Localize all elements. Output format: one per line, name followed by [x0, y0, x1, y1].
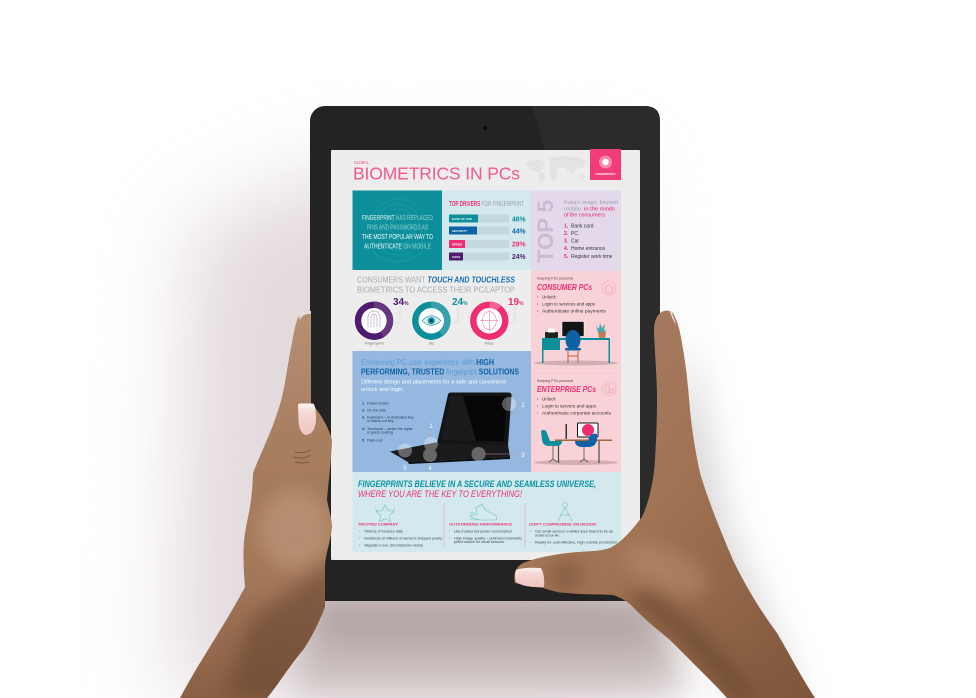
- column: don't compromise on design: Ready for cost-effective, high volume production: [535, 540, 617, 544]
- column: trusted company: Trillions of touches daily: [364, 530, 403, 534]
- camera: [483, 126, 487, 130]
- placement list: [362, 402, 414, 442]
- bar: speed: 28%: [512, 242, 526, 248]
- consumer text: Keeping PCs personal: [537, 276, 573, 280]
- column: trusted company: ›: [359, 530, 360, 534]
- panel: top drivers: [442, 190, 531, 270]
- knuckle creases: [294, 450, 311, 463]
- panel: PC user experience: unlock and login.: [361, 387, 404, 393]
- panel: PC user experience: [352, 351, 531, 472]
- bar: security: 44%: [512, 228, 526, 236]
- enterprise text: Unlock: [542, 396, 557, 402]
- left hand: [180, 310, 332, 698]
- placement list: 3.: [362, 416, 365, 420]
- column: outstanding performance: OUTSTANDING PERFORMANCE: [449, 522, 512, 526]
- tablet body: [310, 106, 660, 601]
- title: BIOMETRICS IN PCs: [353, 164, 520, 184]
- heading: CONSUMERS WANT TOUCH AND TOUCHLESS: [357, 274, 515, 284]
- kicker: GLOBAL: [354, 160, 370, 165]
- panel: consumer and enterprise PCs: [531, 271, 621, 472]
- column: trusted company: Integrated in over 100 smartphone models: [364, 544, 423, 548]
- intro: Future usage, beyond: [564, 200, 618, 206]
- wrist shadow: [226, 561, 325, 698]
- right hand: [510, 300, 820, 698]
- panel: fingerprint replaced pins: AUTHENTICATE ON MOBILE: [364, 242, 431, 250]
- back of hand highlight: [628, 544, 706, 598]
- donut: fingerprint: Fingerprint: [364, 340, 384, 346]
- placement list: or glass coating: [367, 430, 393, 434]
- donut: face: [470, 297, 524, 346]
- enterprise text: [537, 374, 616, 416]
- column: outstanding performance: performance for small sensors: [454, 540, 504, 544]
- description: Different design and placements for a safe and convenient: [361, 380, 506, 386]
- heading: Enhancing PC user experience with HIGH: [361, 358, 494, 367]
- consumer text: ›: [537, 308, 539, 314]
- bar: speed: SPEED: [452, 242, 463, 246]
- ranked list: Car: [571, 238, 579, 244]
- ranked list: 1.: [564, 224, 569, 230]
- logo: [590, 149, 621, 180]
- donut: iris: Iris: [429, 340, 434, 346]
- infographic: [352, 149, 621, 552]
- bar: ease of use: 46%: [512, 216, 526, 224]
- donut: face: Face: [485, 340, 495, 346]
- column: trusted company: TRUSTED COMPANY: [358, 522, 398, 526]
- column: don't compromise on design: ›: [530, 530, 531, 534]
- column: outstanding performance: [449, 504, 522, 544]
- panel: fingerprint replaced pins: PINS AND PASSWORDS AS: [367, 222, 428, 232]
- sensor markers: 5: [403, 466, 407, 472]
- donut: iris: 24%: [452, 297, 468, 308]
- placement list: or stand-out key: [367, 419, 394, 423]
- panel: top 5: mobile, in the minds: [564, 206, 616, 212]
- sensor markers: 1: [429, 424, 433, 430]
- bar: speed: [449, 240, 526, 248]
- donut: face: 19%: [508, 297, 524, 308]
- column: don't compromise on design: [529, 502, 617, 544]
- logo: FINGERPRINTS: [596, 172, 616, 176]
- column: don't compromise on design: Our small sensors enables your brand to be as: [535, 530, 613, 534]
- crease shadow: [625, 590, 760, 698]
- column: outstanding performance: ›: [449, 536, 450, 540]
- panel: fingerprint replaced pins: [352, 190, 442, 270]
- sensor markers: [398, 397, 525, 472]
- bar: cool: [449, 252, 526, 261]
- placement list: 2.: [362, 408, 365, 412]
- donut: fingerprint: [354, 297, 409, 346]
- column: don't compromise on design: DON'T COMPROMISE ON DESIGN: [529, 522, 596, 526]
- panel: touch and touchless: [354, 274, 524, 346]
- placement list: On the side: [367, 408, 386, 412]
- ranked list: Register work time: [571, 254, 613, 260]
- panel: touch and touchless: BIOMETRICS TO ACCESS THEIR PC/LAPTOP: [357, 284, 515, 294]
- sensor markers: 4: [428, 466, 432, 472]
- panel: top 5: [531, 190, 621, 271]
- bar: ease of use: EASE OF USE: [452, 217, 472, 221]
- enterprise text: Authenticate corporate accounts: [542, 410, 612, 416]
- heading: FINGERPRINTS BELIEVE IN A SECURE AND SEAMLESS UNIVERSE,: [358, 479, 596, 489]
- placement list: Keyboard – in dedicated key: [367, 416, 414, 420]
- laptop: [390, 392, 512, 464]
- enterprise text: ›: [537, 410, 539, 416]
- enterprise text: Keeping PCs personal: [537, 379, 573, 383]
- consumer text: [537, 276, 616, 314]
- panel: fingerprint replaced pins: THE MOST POPULAR WAY TO: [362, 232, 433, 241]
- panel: fingerprints believe: [352, 472, 621, 552]
- thumb nail: [515, 568, 544, 587]
- thumb shading: [547, 558, 583, 594]
- placement list: 5.: [362, 438, 365, 442]
- thumb nail: [298, 403, 316, 435]
- big label: TOP 5: [533, 200, 558, 263]
- panel: fingerprints believe: WHERE YOU ARE THE KEY TO EVERYTHING!: [358, 489, 522, 499]
- nail top: [299, 311, 311, 320]
- ranked list: Home entrance: [571, 246, 605, 252]
- consumer text: CONSUMER PCs: [537, 283, 592, 292]
- bar: ease of use: [449, 214, 526, 224]
- column: outstanding performance: High image quality – optimized biometric: [454, 536, 522, 540]
- consumer text: ›: [537, 294, 539, 300]
- enterprise text: ›: [537, 404, 539, 408]
- consumer text: Authenticate online payments: [542, 308, 607, 314]
- finger nail: [669, 309, 676, 326]
- column: don't compromise on design: creative as you like: [535, 534, 559, 538]
- header: [353, 149, 621, 184]
- consumer text: ›: [537, 302, 539, 306]
- bar: cool: COOL: [452, 255, 461, 259]
- column: trusted company: Hundreds of millions of sensors shipped yearly: [364, 536, 442, 540]
- sensor markers: 2: [521, 403, 525, 409]
- column: don't compromise on design: ›: [530, 540, 531, 544]
- ranked list: Bank card: [571, 224, 594, 230]
- ranked list: 5.: [564, 254, 569, 260]
- ranked list: 2.: [564, 231, 569, 237]
- world map: [525, 156, 586, 184]
- donut: fingerprint: 34%: [393, 297, 409, 308]
- bar: security: SECURITY: [452, 229, 467, 233]
- heading: TOP DRIVERS FOR FINGERPRINT: [449, 199, 524, 208]
- illustration: home desk: [534, 322, 618, 366]
- bar: cool: 24%: [512, 254, 526, 261]
- donut: iris: [412, 297, 468, 346]
- tablet: [310, 106, 660, 601]
- placement list: 1.: [362, 402, 365, 406]
- enterprise text: Login to servers and apps: [542, 404, 597, 408]
- screen: [331, 150, 640, 560]
- column: trusted company: ›: [359, 544, 360, 548]
- placement list: Palm rest: [367, 438, 383, 442]
- ranked list: 3.: [564, 238, 569, 244]
- ranked list: 4.: [564, 246, 569, 252]
- column: outstanding performance: Use trusted low power consumption: [454, 530, 512, 534]
- panel: PC user experience: PERFORMING, TRUSTED fingerprint SOLUTIONS: [361, 368, 520, 376]
- illustration: office desk: [534, 423, 618, 465]
- sensor markers: 3: [521, 453, 525, 459]
- column: outstanding performance: ›: [449, 530, 450, 534]
- column: trusted company: ›: [359, 536, 360, 540]
- placement list: Touchpad – under the mylar: [367, 427, 413, 431]
- consumer text: Unlock: [542, 294, 557, 300]
- ranked list: PC: [571, 231, 578, 237]
- palm highlight: [259, 490, 331, 570]
- placement list: Power button: [367, 402, 389, 406]
- consumer text: Login to services and apps: [542, 302, 596, 306]
- placement list: 4.: [362, 427, 365, 431]
- enterprise text: ENTERPRISE PCs: [537, 385, 596, 394]
- enterprise text: ›: [537, 396, 539, 402]
- panel: fingerprint replaced pins: FINGERPRINT HAS REPLACED: [362, 213, 433, 222]
- panel: top 5: of the consumers: [564, 212, 606, 218]
- column: trusted company: [358, 505, 442, 548]
- bar: security: [449, 226, 526, 236]
- ranked list: [564, 224, 613, 260]
